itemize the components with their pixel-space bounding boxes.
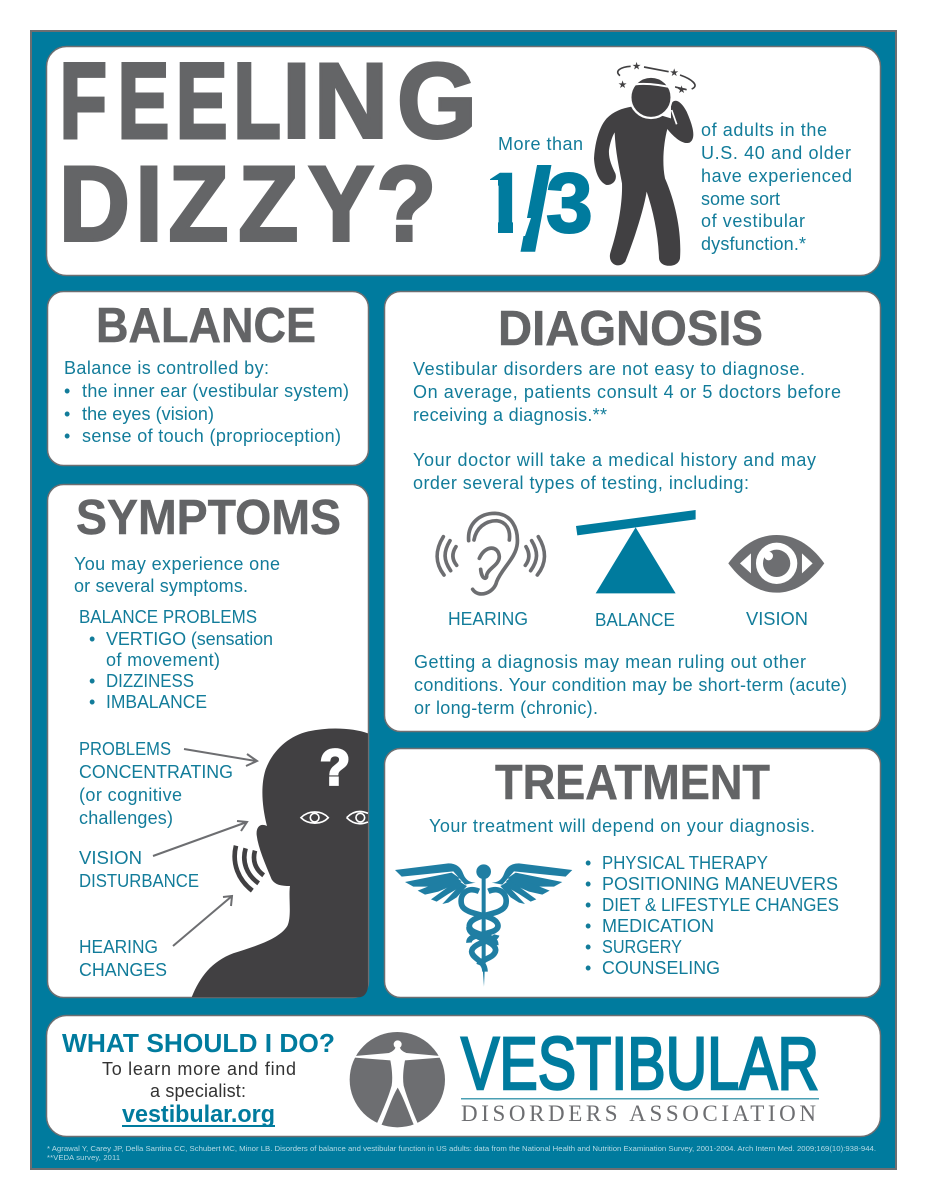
statistic: more than one third: [478, 134, 593, 274]
text: diagnosis intro: Vestibular disorders are not easy to diagnose.: [413, 359, 805, 379]
text: balance problems list: IMBALANCE: [106, 692, 207, 712]
title: [59, 41, 477, 263]
arrow: vision: [153, 821, 247, 856]
text: balance problems list: •: [89, 629, 95, 649]
heading: what should I do: WHAT SHOULD I DO?: [62, 1028, 335, 1058]
heading: symptoms: SYMPTOMS: [76, 491, 341, 545]
logo: vestibular wordmark: VESTIBULAR: [461, 1022, 819, 1105]
text: problems concentrating: challenges): [79, 808, 173, 828]
panel: symptoms: [48, 484, 368, 998]
icon: eyes: [301, 811, 368, 824]
text: symptoms intro: [74, 554, 280, 596]
icon: dizzy person: ★: [670, 67, 680, 79]
text: diagnosis conclusion: [414, 652, 847, 718]
text: balance list: the inner ear (vestibular system): [82, 381, 349, 401]
heading: diagnosis: DIAGNOSIS: [498, 302, 763, 356]
logo: disorders association: DISORDERS ASSOCIATION: [461, 1101, 816, 1126]
text: diagnosis conclusion: Getting a diagnosis may mean ruling out other: [414, 652, 806, 672]
text: treatment list: •: [585, 937, 591, 957]
panel: header: [46, 41, 880, 276]
statistic: more than one third: More than: [498, 134, 583, 154]
statistic: more than one third: /: [520, 146, 552, 274]
icon: vestibular logo figure: [350, 1032, 445, 1129]
text: vision disturbance: [79, 848, 199, 891]
icon: dizzy person: ★: [618, 79, 628, 91]
text: treatment list: MEDICATION: [602, 916, 714, 936]
footnotes: **VEDA survey, 2011: [47, 1153, 120, 1162]
footnotes: [47, 1144, 876, 1162]
text: treatment list: [585, 853, 839, 978]
text: hearing changes: HEARING: [79, 937, 158, 957]
text: balance list: •: [64, 381, 70, 401]
text: treatment list: •: [585, 958, 591, 978]
icon: vision eye: [728, 535, 824, 593]
illustration: head silhouette: [192, 728, 368, 997]
icon: sound waves: [235, 846, 264, 891]
divider rule: [461, 1098, 819, 1100]
text: treatment list: •: [585, 853, 591, 873]
link: vestibular.org: vestibular.org: [122, 1101, 275, 1128]
icon: caduceus: [395, 863, 572, 987]
icon: hearing ear: [437, 513, 544, 594]
statistic: more than one third: 1: [480, 156, 527, 250]
title: ING: [282, 42, 477, 161]
text: diagnosis intro: Your doctor will take a medical history and may: [413, 450, 816, 470]
icon: balance seesaw: [576, 510, 696, 593]
text: vision disturbance: VISION: [79, 848, 142, 868]
text: diagnosis intro: [413, 359, 841, 493]
text: balance list: sense of touch (proprioception): [82, 426, 341, 446]
panel: balance: [48, 292, 368, 466]
text: balance problems list: DIZZINESS: [106, 671, 194, 691]
text: statistic description: of adults in the: [701, 120, 827, 140]
title: DIZZY?: [59, 144, 436, 263]
footnotes: * Agrawal Y, Carey JP, Della Santina CC, Schubert MC, Minor LB. Disorders of balance and vestibular function in US adults: data from the National Health and Nutrition Examination Survey, 2001-2004. Arch Intern Med. 2009;169(10):938-944.: [47, 1144, 876, 1153]
text: balance list: Balance is controlled by:: [64, 358, 269, 378]
heading: balance: BALANCE: [96, 299, 316, 353]
text: balance list: the eyes (vision): [82, 404, 214, 424]
statistic: more than one third: 3: [546, 156, 593, 250]
text: problems concentrating: PROBLEMS: [79, 739, 171, 759]
text: balance problems list: [79, 607, 273, 712]
text: treatment list: DIET & LIFESTYLE CHANGES: [602, 895, 839, 915]
text: balance list: •: [64, 404, 70, 424]
panel: treatment: [384, 748, 880, 998]
text: symptoms intro: You may experience one: [74, 554, 280, 574]
text: diagnosis conclusion: or long-term (chronic).: [414, 698, 598, 718]
text: treatment list: COUNSELING: [602, 958, 720, 978]
icon: question mark: ?: [320, 740, 350, 796]
text: treatment intro: Your treatment will depend on your diagnosis.: [429, 816, 815, 836]
text: symptoms intro: or several symptoms.: [74, 576, 248, 596]
text: treatment list: •: [585, 874, 591, 894]
text: balance list: •: [64, 426, 70, 446]
text: diagnosis intro: receiving a diagnosis.**: [413, 405, 607, 425]
text: balance problems list: VERTIGO (sensation: [106, 629, 273, 649]
text: balance problems list: •: [89, 692, 95, 712]
text: balance problems list: of movement): [106, 650, 220, 670]
arrow: concentrating: [184, 749, 257, 766]
text: hearing changes: CHANGES: [79, 960, 167, 980]
text: call to action: To learn more and find: [102, 1059, 296, 1079]
icon: dizzy person: [594, 60, 695, 266]
text: diagnosis conclusion: conditions. Your condition may be short-term (acute): [414, 675, 847, 695]
text: treatment list: •: [585, 916, 591, 936]
text: statistic description: have experienced: [701, 166, 852, 186]
arrow: hearing: [173, 896, 232, 946]
title: FEEL: [60, 41, 281, 160]
icon: dizzy person: ★: [677, 84, 687, 96]
label: balance: BALANCE: [595, 610, 675, 630]
heading: treatment: TREATMENT: [495, 756, 770, 810]
text: treatment list: •: [585, 895, 591, 915]
text: treatment list: SURGERY: [602, 937, 682, 957]
text: statistic description: some sort: [701, 189, 780, 209]
text: balance problems list: BALANCE PROBLEMS: [79, 607, 257, 627]
text: hearing changes: [79, 937, 167, 980]
text: statistic description: U.S. 40 and older: [701, 143, 851, 163]
text: call to action: [102, 1059, 296, 1101]
icon: dizzy person: ★: [632, 60, 642, 72]
text: balance problems list: •: [89, 671, 95, 691]
text: statistic description: of vestibular: [701, 211, 805, 231]
text: diagnosis intro: On average, patients consult 4 or 5 doctors before: [413, 382, 841, 402]
text: balance list: [64, 358, 349, 446]
panel: what should I do: [46, 1016, 880, 1136]
text: problems concentrating: [79, 739, 233, 828]
text: call to action: a specialist:: [150, 1081, 246, 1101]
text: treatment list: PHYSICAL THERAPY: [602, 853, 768, 873]
text: diagnosis intro: order several types of testing, including:: [413, 473, 749, 493]
panel: diagnosis: [384, 292, 880, 732]
text: treatment list: POSITIONING MANEUVERS: [602, 874, 838, 894]
text: vision disturbance: DISTURBANCE: [79, 871, 199, 891]
text: problems concentrating: (or cognitive: [79, 785, 182, 805]
label: vision: VISION: [746, 609, 808, 629]
label: hearing: HEARING: [448, 609, 528, 629]
text: statistic description: [701, 120, 852, 254]
text: problems concentrating: CONCENTRATING: [79, 762, 233, 782]
text: statistic description: dysfunction.*: [701, 234, 806, 254]
